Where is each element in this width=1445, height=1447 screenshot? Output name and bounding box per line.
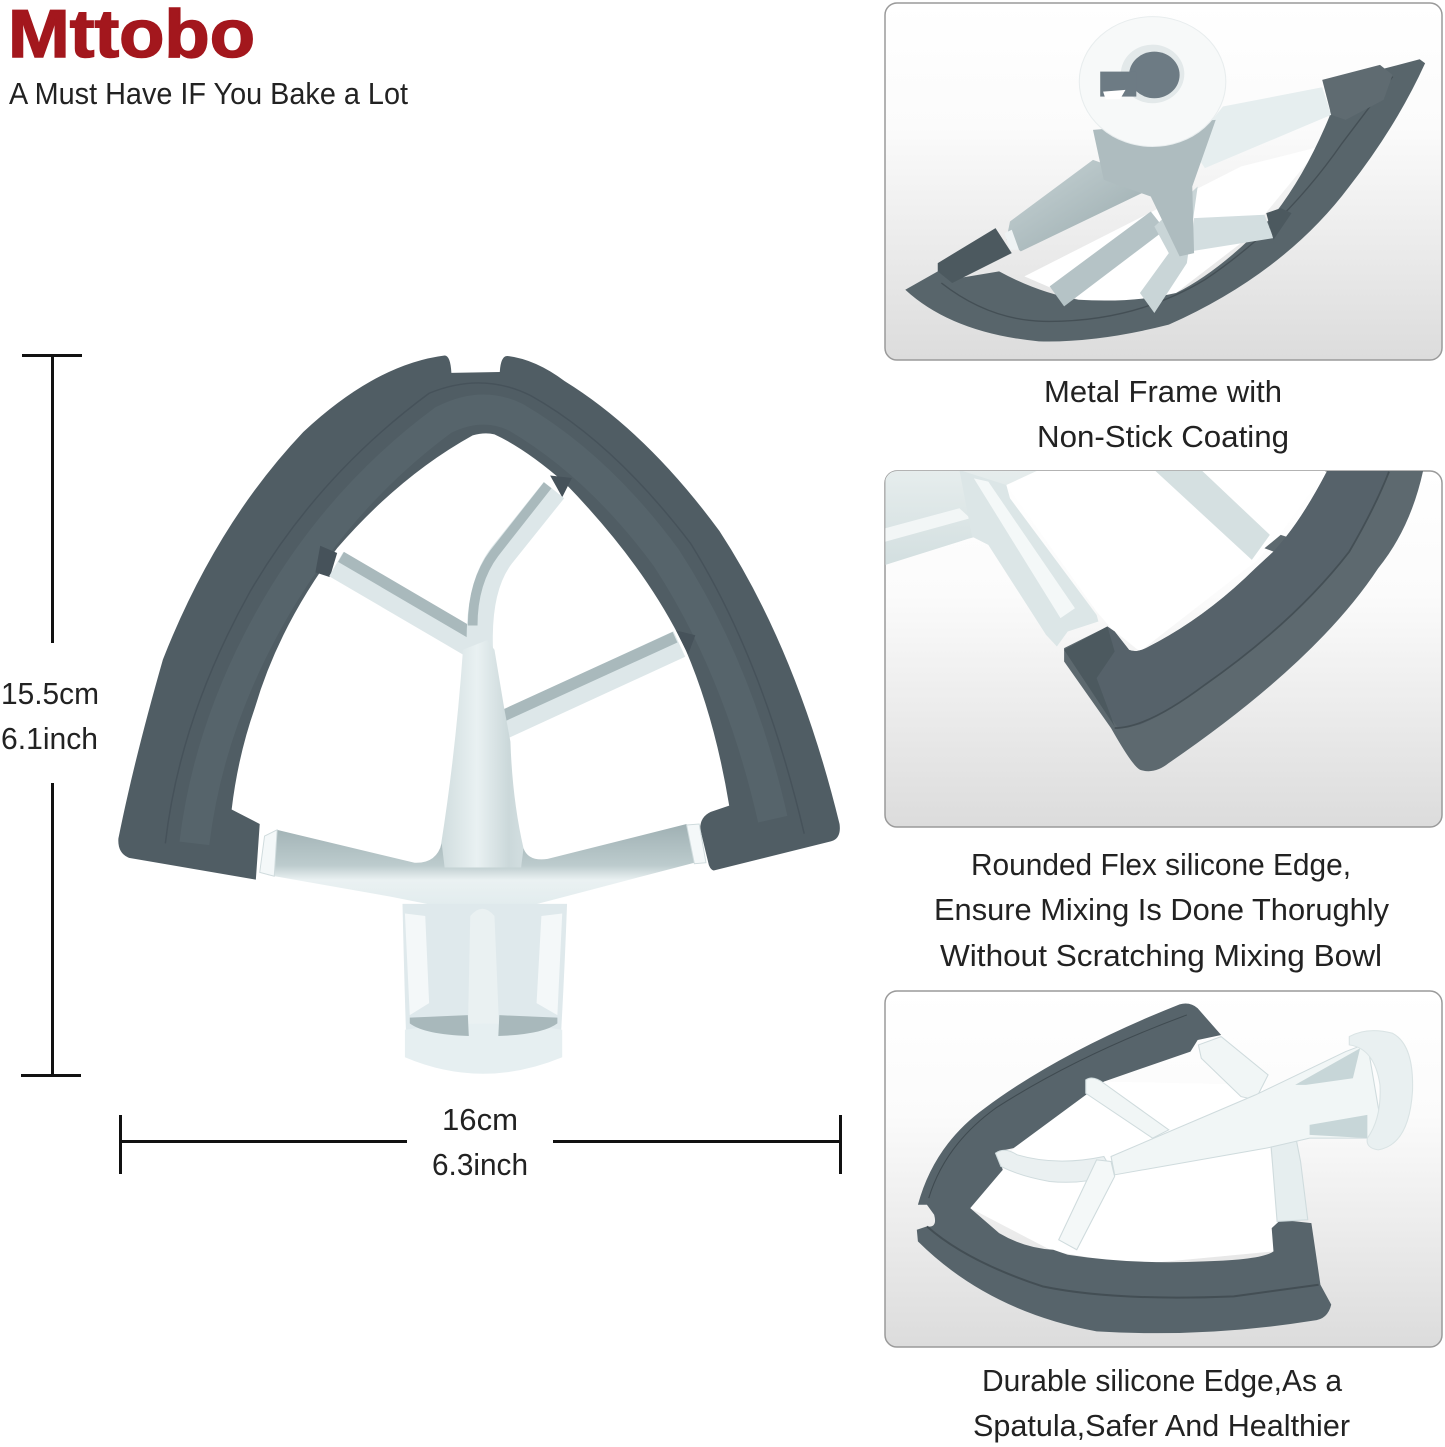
metal stem [429, 640, 536, 911]
photo: blade corner [885, 468, 1423, 771]
dimension arrow: width [119, 1115, 842, 1174]
dimension label: height: 6.1inch [1, 721, 98, 756]
caption: durable edge [973, 1363, 1350, 1443]
caption: rounded edge: Rounded Flex silicone Edge, [971, 847, 1351, 882]
dimension label: width: 16cm [442, 1102, 518, 1137]
caption: metal frame: Metal Frame with [1044, 374, 1282, 409]
illustration: flex edge beater main view [118, 355, 840, 1074]
caption: rounded edge: Without Scratching Mixing Bowl [940, 938, 1382, 973]
metal arms [267, 824, 694, 906]
subtitle: tagline: A Must Have IF You Bake a Lot [9, 76, 408, 111]
dimension label: height: 15.5cm [1, 676, 99, 711]
caption: durable edge: Spatula,Safer And Healthier [973, 1408, 1350, 1443]
panel: durable silicone edge side view [885, 991, 1442, 1347]
panel frame [885, 991, 1442, 1347]
dimension label: width: 6.3inch [432, 1147, 528, 1182]
metal collars [260, 824, 706, 876]
panel frame [885, 3, 1442, 360]
beater neck [403, 904, 567, 1030]
beater mounting base [405, 1024, 562, 1074]
caption: metal frame: Non-Stick Coating [1037, 419, 1289, 454]
dimension arrow: height [21, 354, 82, 1077]
caption: rounded edge [934, 847, 1389, 973]
raised band on blade [194, 410, 773, 843]
caption: metal frame [1037, 374, 1289, 454]
photo: beater from above [905, 17, 1425, 341]
panel frame [885, 471, 1442, 827]
silicone scraper blade [118, 355, 840, 880]
caption: durable edge: Durable silicone Edge,As a [982, 1363, 1343, 1398]
panel: metal frame close-up [885, 3, 1442, 360]
panel: rounded silicone edge close-up [885, 468, 1442, 827]
caption: rounded edge: Ensure Mixing Is Done Thorughly [934, 892, 1389, 927]
dimension label: height [1, 676, 99, 756]
silicone rib sockets [315, 476, 695, 655]
dimension label: width [432, 1102, 528, 1182]
photo: beater side view [917, 1004, 1413, 1333]
metal ribs [336, 485, 679, 726]
